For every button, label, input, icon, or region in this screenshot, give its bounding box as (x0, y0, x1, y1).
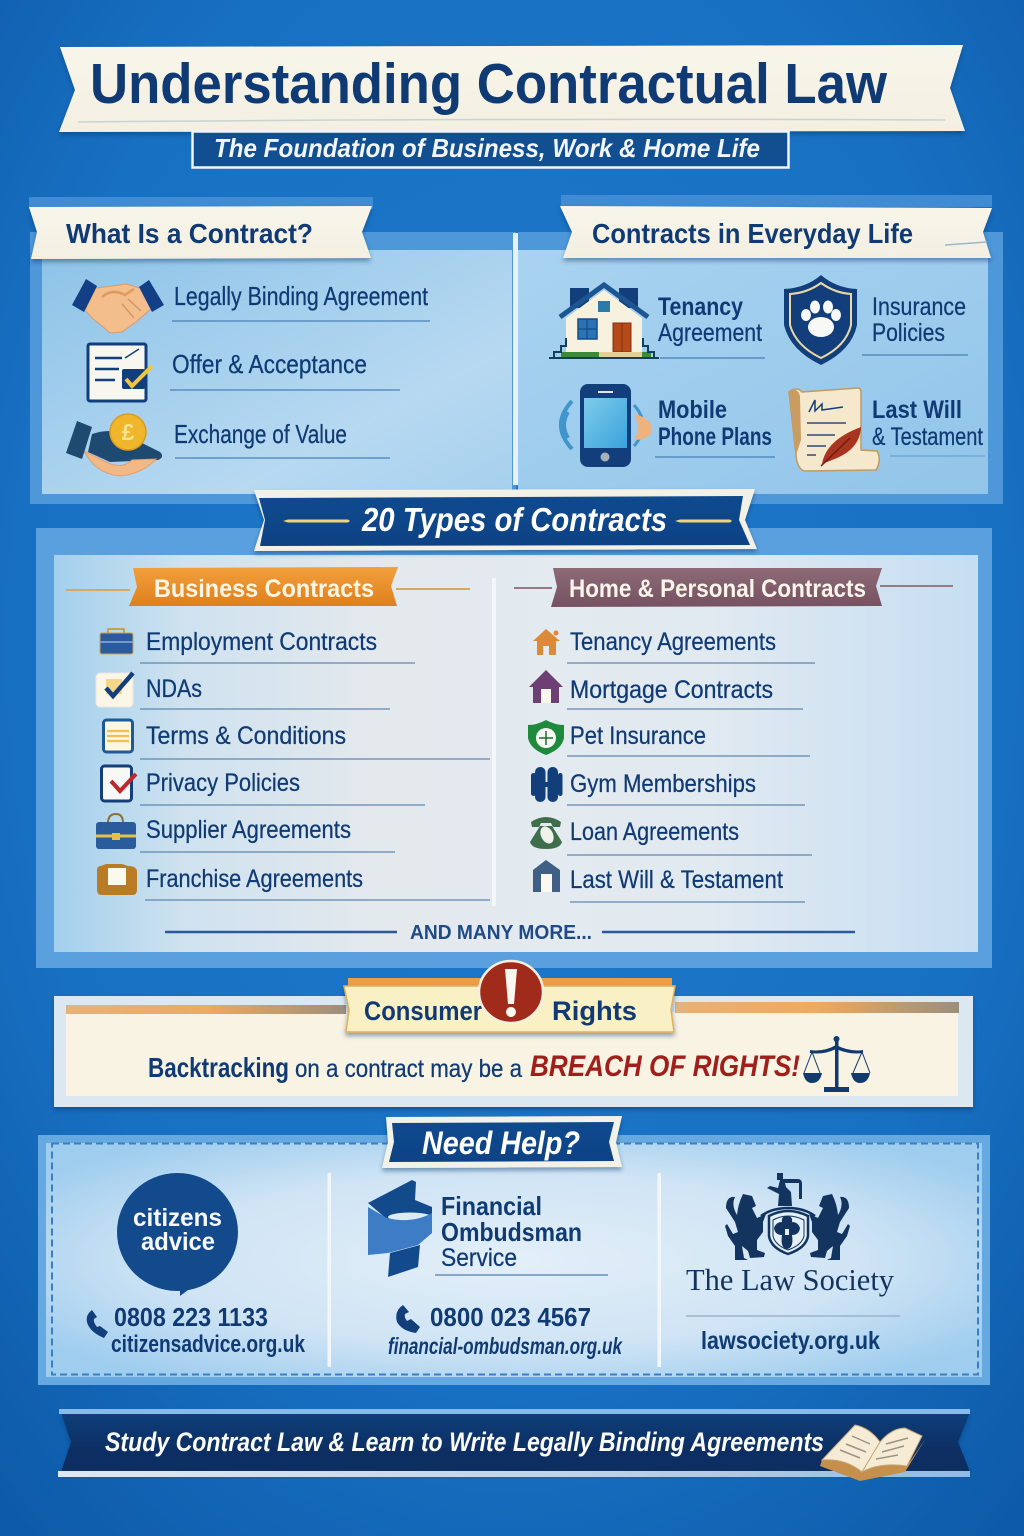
helper: citizens advice: citizensadvice.org.uk (111, 1331, 306, 1358)
panel: need help (38, 1135, 990, 1385)
list: home and personal contracts: Loan Agreements (570, 818, 739, 846)
panel: consumer rights (54, 961, 973, 1107)
helper: the law society: lawsociety.org.uk (701, 1327, 880, 1355)
item: insurance policies: Policies (872, 319, 945, 347)
helper: citizens advice (87, 1173, 306, 1358)
icon: open book (820, 1425, 926, 1481)
title: Understanding Contractual Law (90, 52, 888, 116)
icon: hand with pound coin: £ (122, 419, 135, 445)
item: tenancy agreement: Tenancy (658, 293, 743, 321)
heading: what is a contract (29, 197, 373, 259)
and many more: AND MANY MORE... (410, 922, 592, 944)
helper: the law society: The Law Society (686, 1262, 894, 1297)
list: business contracts: Privacy Policies (146, 769, 300, 797)
logo: citizens advice: citizens (133, 1204, 222, 1232)
heading: business contracts: Business Contracts (154, 575, 374, 603)
helper: financial ombudsman service: 0800 023 4567 (430, 1302, 591, 1332)
icon: notepad (104, 720, 132, 752)
warning text: on a contract may be a (295, 1055, 522, 1083)
item: last will and testament: Last Will (872, 396, 962, 424)
helper: financial ombudsman service: financial-ombudsman.org.uk (388, 1333, 623, 1359)
icon: briefcase (100, 629, 133, 654)
item: tenancy agreement (549, 285, 765, 358)
list: home and personal contracts: Pet Insurance (570, 722, 706, 750)
icon: purple house (529, 670, 563, 703)
list: home and personal contracts: Tenancy Agreements (570, 628, 776, 656)
heading: business contracts (66, 567, 470, 606)
heading: home and personal contracts (514, 568, 953, 607)
helper: citizens advice: 0808 223 1133 (114, 1302, 268, 1332)
icon: scales of justice (803, 1036, 870, 1092)
heading: contracts in everyday life (560, 195, 992, 258)
icon: document with tick (88, 344, 152, 401)
icon: case (96, 814, 136, 849)
icon: house (549, 285, 659, 358)
warning text: Backtracking (148, 1052, 289, 1083)
list: home and personal contracts: Last Will & Testament (570, 866, 783, 894)
logo: law society crest (725, 1173, 850, 1260)
icon: slate house (533, 860, 560, 892)
helper: financial ombudsman service: Service (441, 1244, 517, 1272)
item: exchange of value: Exchange of Value (174, 419, 347, 449)
icon: phone handset (396, 1305, 420, 1333)
item: last will and testament: & Testament (872, 423, 983, 451)
item: legally binding agreement: Legally Binding Agreement (174, 281, 429, 311)
icon: green shield (528, 720, 564, 755)
icon: exclamation mark (479, 961, 543, 1023)
footer banner (58, 1409, 970, 1481)
item: insurance policies: Insurance (872, 293, 966, 321)
icon: handshake (72, 279, 164, 333)
logo: financial ombudsman (368, 1180, 432, 1277)
panel: contracts in everyday life (518, 195, 1003, 504)
item: offer and acceptance (88, 344, 400, 401)
list: business contracts: Terms & Conditions (146, 722, 346, 750)
heading: need help (382, 1116, 622, 1168)
list: home and personal contracts: Mortgage Contracts (570, 676, 773, 704)
item: insurance policies (784, 275, 968, 365)
helper: financial ombudsman service (368, 1180, 623, 1359)
list: business contracts: NDAs (146, 675, 202, 703)
item: mobile phone plans: Phone Plans (658, 423, 772, 451)
icon: red tick box (102, 766, 136, 801)
helper: financial ombudsman service: Ombudsman (441, 1217, 582, 1247)
logo: citizens advice (117, 1173, 238, 1296)
panel: what is a contract (29, 197, 518, 504)
item: last will and testament (789, 388, 985, 471)
icon: navy tick (96, 673, 133, 707)
icon: phone (561, 384, 652, 467)
list: home and personal contracts: Gym Memberships (570, 770, 756, 798)
logo: citizens advice: advice (141, 1228, 215, 1256)
list: business contracts: Employment Contracts (146, 628, 377, 656)
icon: gym (531, 767, 562, 802)
heading: 20 types of contracts: 20 Types of Contracts (361, 501, 667, 538)
warning text: BREACH OF RIGHTS! (530, 1050, 800, 1083)
heading: contracts in everyday life: Contracts in Everyday Life (592, 218, 913, 249)
list: business contracts: Franchise Agreements (146, 865, 363, 893)
icon: folder (97, 864, 137, 895)
item: tenancy agreement: Agreement (658, 319, 762, 347)
list: home and personal contracts (528, 628, 815, 902)
heading: need help: Need Help? (422, 1125, 580, 1161)
item: mobile phone plans (561, 384, 775, 467)
warning text (148, 1050, 800, 1083)
icon: green telephone (530, 817, 562, 849)
panel: types of contracts (36, 528, 992, 968)
icon: shield with paw (784, 275, 857, 365)
footer banner: Study Contract Law & Learn to Write Legally Binding Agreements (105, 1427, 824, 1457)
item: offer and acceptance: Offer & Acceptance (172, 349, 367, 379)
icon: phone handset (87, 1310, 108, 1338)
subtitle: The Foundation of Business, Work & Home Life (214, 133, 760, 163)
item: legally binding agreement (72, 279, 430, 333)
helper: the law society (686, 1173, 900, 1355)
heading: what is a contract: What Is a Contract? (66, 218, 313, 249)
heading: consumer rights (344, 961, 675, 1032)
item: exchange of value (66, 414, 390, 476)
heading: home and personal contracts: Home & Personal Contracts (569, 575, 866, 603)
title banner (59, 45, 965, 132)
helper: financial ombudsman service: Financial (441, 1191, 542, 1221)
icon: scroll with quill (789, 388, 879, 471)
list: business contracts: Supplier Agreements (146, 816, 351, 844)
heading: 20 types of contracts (254, 489, 757, 551)
heading: consumer rights: Consumer (364, 996, 482, 1026)
heading: consumer rights: Rights (552, 996, 637, 1026)
icon: orange house (533, 629, 560, 655)
list: business contracts (96, 628, 490, 900)
icon: hand with pound coin (66, 414, 162, 476)
item: mobile phone plans: Mobile (658, 396, 727, 424)
